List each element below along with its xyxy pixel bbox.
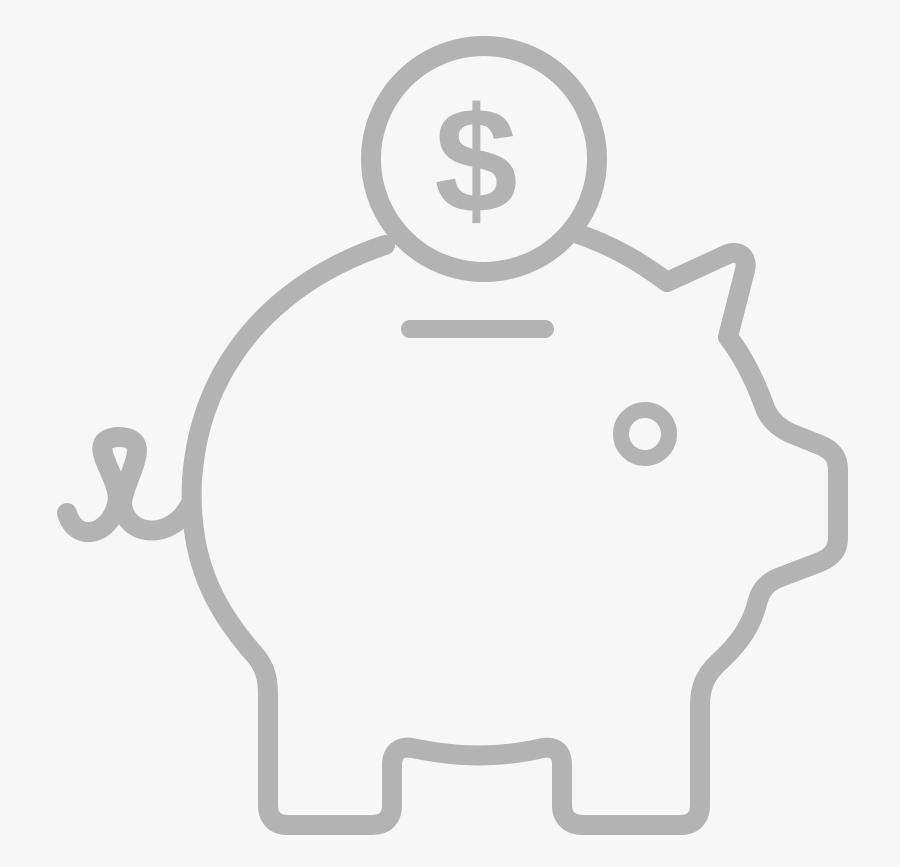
coin slot [410, 320, 545, 338]
icon: piggy bank [67, 46, 838, 825]
coin [371, 46, 597, 272]
dollar sign: $ [434, 76, 518, 244]
pig eye [621, 410, 669, 458]
pig tail [67, 437, 190, 532]
pig body [192, 233, 838, 825]
